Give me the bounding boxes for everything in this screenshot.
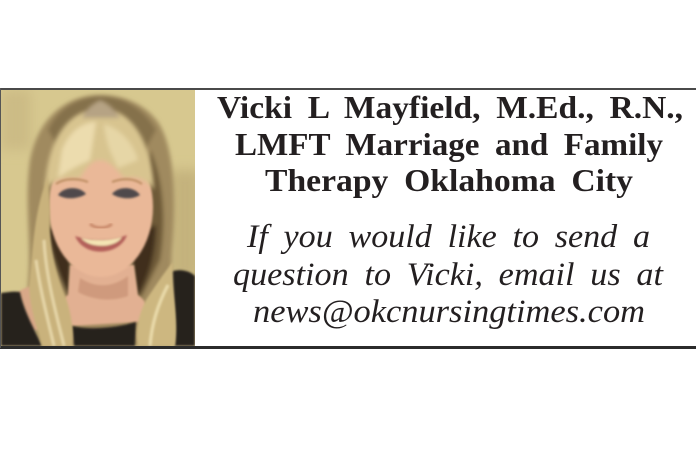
heading: Therapy Oklahoma City bbox=[265, 162, 633, 198]
front hair strands bbox=[29, 176, 176, 346]
nose bbox=[90, 224, 112, 228]
smile bbox=[75, 235, 127, 252]
bottom rule bbox=[0, 346, 696, 349]
portrait photo bbox=[1, 90, 200, 346]
fringe bbox=[45, 100, 154, 190]
hair back bbox=[28, 95, 174, 346]
heading: Vicki L Mayfield, M.Ed., R.N., bbox=[217, 89, 683, 125]
eyes bbox=[56, 179, 142, 198]
contact text: If you would like to send a bbox=[246, 219, 650, 255]
black top bbox=[1, 270, 195, 346]
heading bbox=[217, 89, 683, 198]
contact text: question to Vicki, email us at bbox=[233, 257, 664, 293]
contact text: news@okcnursingtimes.com bbox=[253, 294, 645, 330]
top rule bbox=[0, 88, 696, 90]
contact text bbox=[233, 219, 664, 330]
face bbox=[49, 158, 154, 268]
left rule bbox=[0, 88, 1, 348]
heading: LMFT Marriage and Family bbox=[235, 126, 663, 162]
neck and chest skin bbox=[18, 265, 148, 330]
banner: columnist card bbox=[0, 88, 696, 349]
